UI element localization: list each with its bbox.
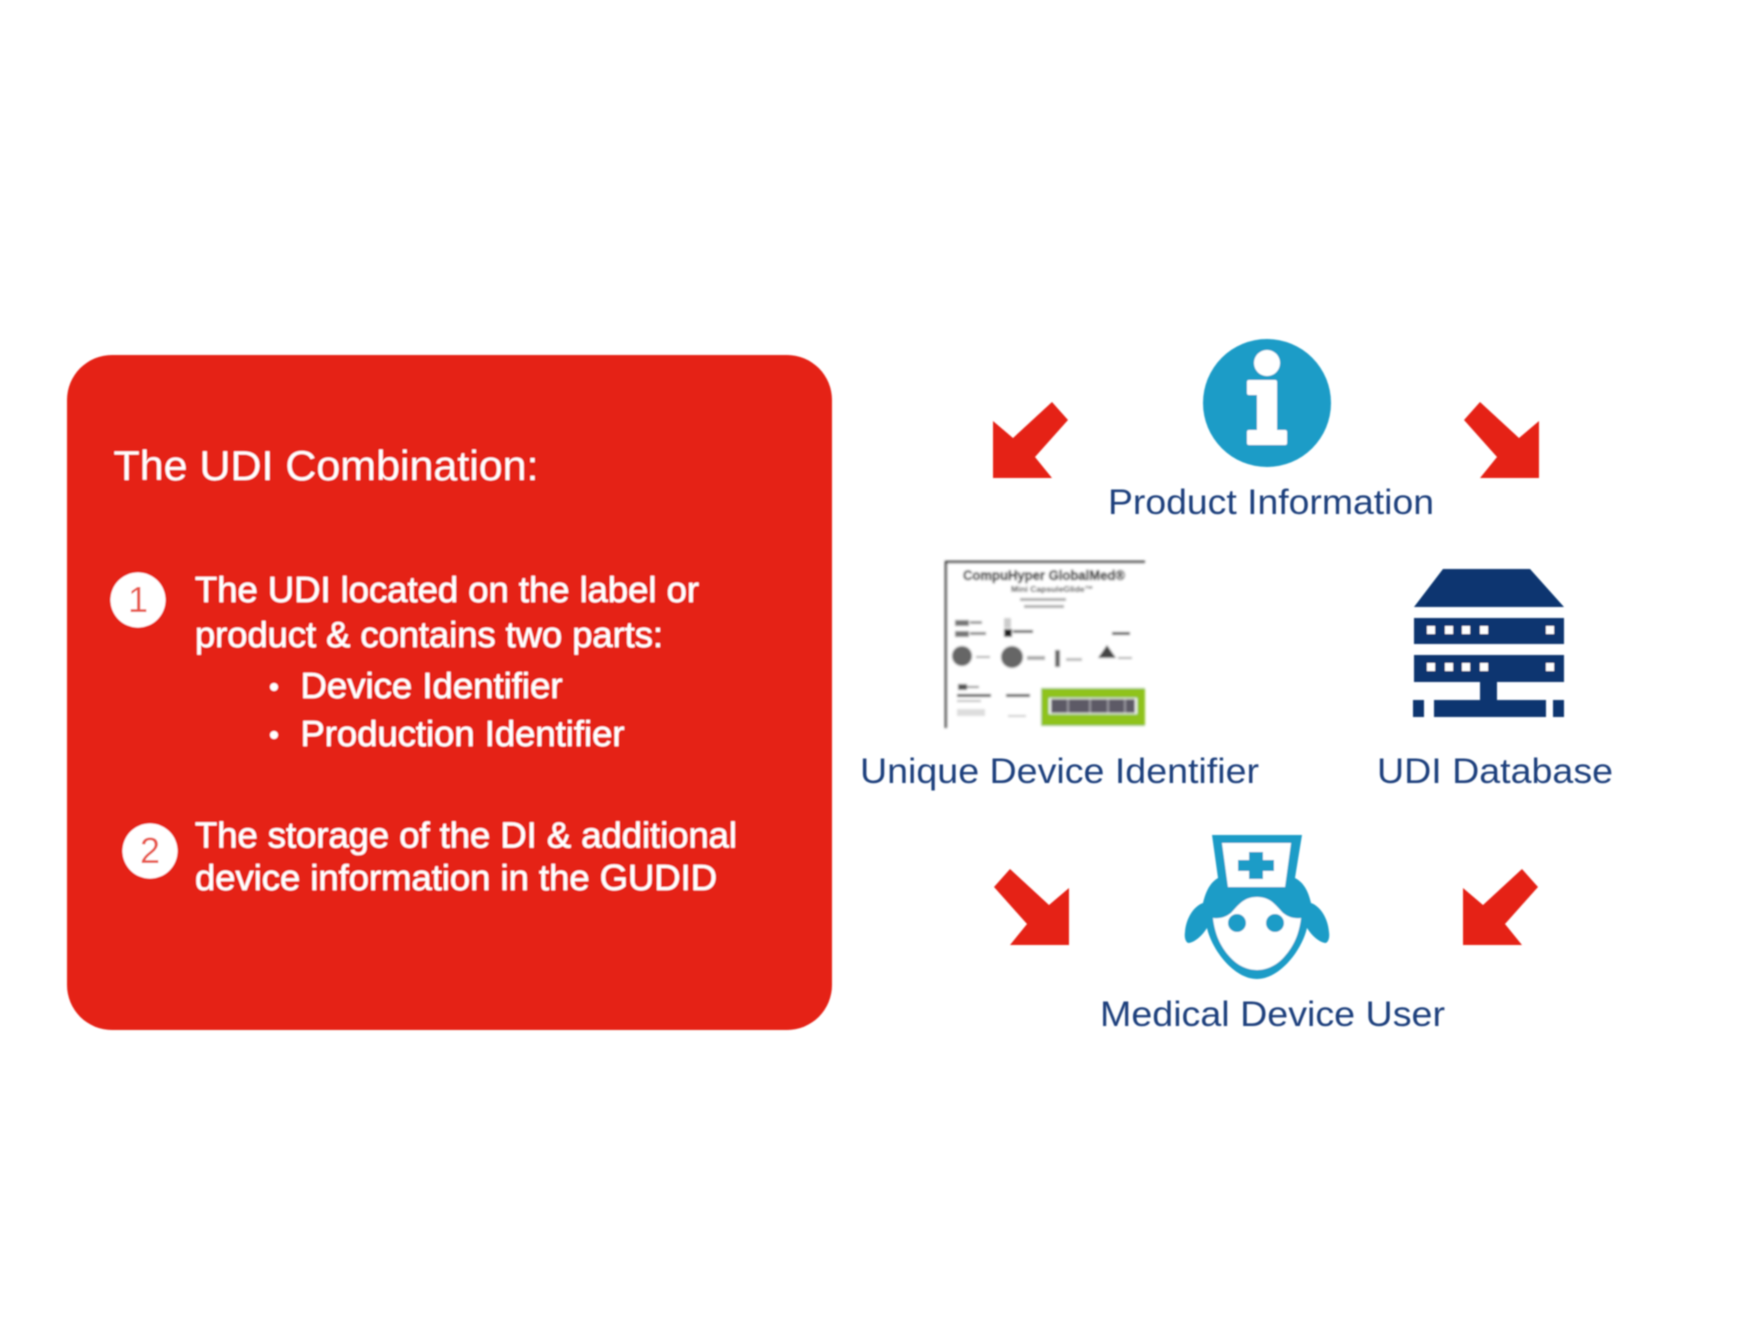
item 1 number badge: 1 <box>128 579 148 620</box>
item 1 number badge <box>110 572 166 628</box>
arrow: bottom left <box>994 869 1069 945</box>
item 2 text: device information in the GUDID <box>195 857 717 898</box>
item 1 text: The UDI located on the label or <box>195 569 699 610</box>
item 2 text: The storage of the DI & additional <box>195 814 737 856</box>
arrow: bottom right <box>1463 869 1538 945</box>
item 2 number badge: 2 <box>140 830 160 871</box>
label: UDI Database: UDI Database <box>1377 752 1613 791</box>
bullet list: identifier parts: Device Identifier <box>300 665 563 706</box>
icon: product information <box>1203 339 1331 467</box>
label: Medical Device User: Medical Device User <box>1100 995 1445 1034</box>
arrow: top left <box>993 402 1068 478</box>
item 1 text: product & contains two parts: <box>195 614 663 655</box>
bullet list: identifier parts <box>270 665 625 754</box>
bullet list: identifier parts: Production Identifier <box>300 713 625 754</box>
label: Unique Device Identifier: Unique Device Identifier <box>860 752 1259 791</box>
label: Product Information: Product Information <box>1108 483 1434 522</box>
icon: nurse medical device user <box>1185 835 1329 979</box>
heading: The UDI Combination: The UDI Combination: <box>114 442 538 489</box>
icon: device label with barcode: CompuHyper GlobalMed® <box>963 567 1126 583</box>
panel: the UDI combination <box>67 355 832 1030</box>
arrow: top right <box>1464 402 1539 478</box>
icon: device label with barcode <box>945 561 1145 728</box>
item 2 text <box>195 814 737 898</box>
item 1 text <box>195 569 699 655</box>
icon: device label with barcode: Mini CapsuleGlide™ <box>1011 584 1093 594</box>
item 2 number badge <box>122 824 178 878</box>
icon: UDI database server <box>1413 569 1564 717</box>
